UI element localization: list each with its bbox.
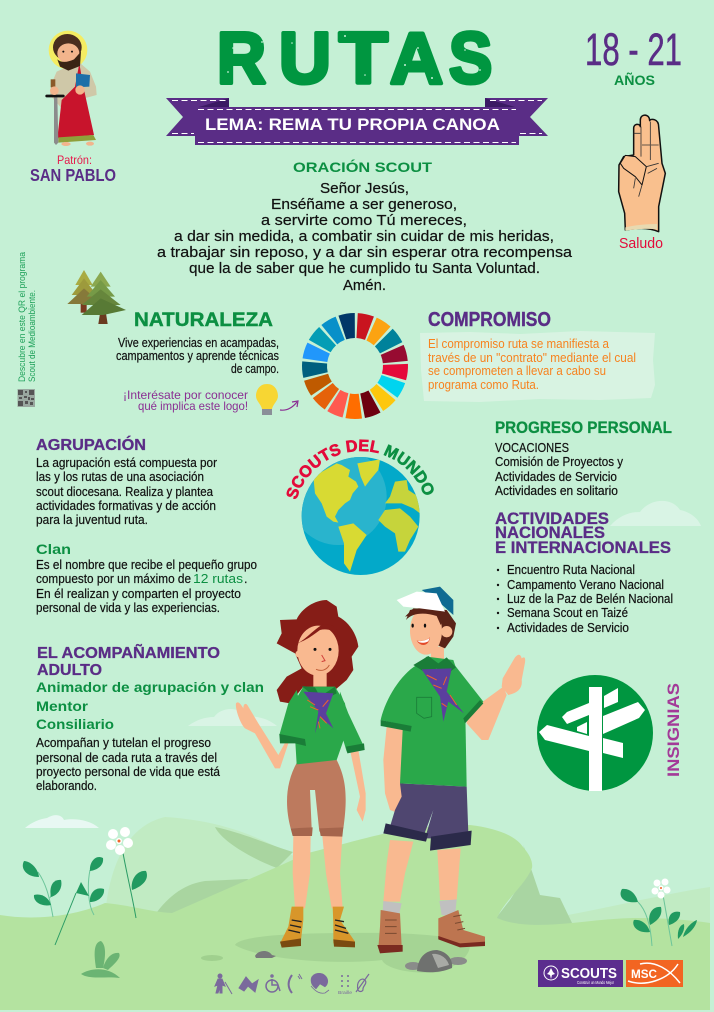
title: S: [449, 18, 492, 99]
panel: acompanamiento adulto: EL ACOMPAÑAMIENTO: [37, 642, 220, 662]
panel: agrupacion: AGRUPACIÓN: [36, 435, 146, 454]
plants right: [621, 878, 697, 946]
panel: clan: [36, 542, 257, 615]
panel: naturaleza: Vive experiencias en acampadas,: [118, 336, 279, 350]
icon: blind person: [215, 974, 232, 994]
logo: msc: [626, 960, 683, 987]
prayer: que la de saber que he cumplido tu Santa Voluntad.: [189, 261, 540, 277]
panel: compromiso: través de un "contrato" mediante el cual: [428, 351, 636, 365]
panel: agrupacion: [36, 435, 217, 527]
title: U: [279, 19, 331, 99]
panel: acompanamiento adulto: Acompañan y tutelan el progreso: [36, 736, 211, 750]
panel: compromiso: [420, 309, 655, 402]
scouts del mundo arc: SCOUTS DEL MUNDO: [286, 439, 434, 499]
arrow to logo: [280, 401, 298, 410]
prayer: Señor Jesús,: [320, 181, 409, 197]
panel: naturaleza: qué implica este logo!: [138, 399, 248, 413]
panel: acompanamiento adulto: elaborando.: [36, 779, 97, 793]
character: boy: [377, 587, 525, 953]
panel: progreso personal: [495, 419, 672, 498]
panel: clan: Clan: [36, 542, 71, 557]
panel: compromiso: COMPROMISO: [428, 309, 551, 331]
panel: acompanamiento adulto: Consiliario: [36, 717, 114, 732]
icon: hearing: [356, 974, 369, 992]
panel: clan: personal de vida y las experiencias.: [36, 601, 220, 615]
prayer: Enséñame a ser generoso,: [271, 197, 457, 213]
panel: clan: compuesto por un máximo de: [36, 572, 191, 586]
rocks: [255, 950, 467, 972]
icon: light bulb: [256, 384, 278, 415]
panel: actividades: E INTERNACIONALES: [495, 539, 671, 557]
panel: progreso personal: Actividades en solitario: [495, 484, 618, 498]
icon: trees: [67, 270, 126, 324]
icon: small white flower: [652, 878, 670, 898]
icon: head: [311, 973, 329, 993]
grass tuft: [81, 941, 120, 978]
panel: acompanamiento adulto: proyecto personal de vida que está: [36, 765, 220, 779]
insignias label: INSIGNIAS: [665, 683, 683, 777]
icon: san pablo: [47, 31, 97, 146]
prayer: [157, 158, 573, 294]
panel: progreso personal: Actividades de Servicio: [495, 470, 617, 484]
prayer: Amén.: [343, 278, 386, 294]
prayer: a dar sin medida, a combatir sin cuidar de mis heridas,: [174, 229, 554, 245]
icon: phone: [289, 974, 302, 993]
ribbon: lema: LEMA: REMA TU PROPIA CANOA: [205, 116, 500, 134]
prayer: a servirte como Tú mereces,: [261, 213, 467, 229]
panel: clan: Es el nombre que recibe el pequeño grupo: [36, 558, 257, 572]
qr note: Descubre en este QR el programa: [17, 251, 28, 382]
panel: naturaleza: ¡Interésate por conocer: [123, 388, 248, 402]
panel: clan: 12 rutas: [193, 571, 244, 586]
qr note: [17, 251, 38, 407]
panel: compromiso: programa como Ruta.: [428, 378, 539, 392]
panel: actividades: [495, 510, 673, 635]
panel: actividades: Actividades de Servicio: [507, 621, 629, 635]
logo: scouts: [538, 960, 623, 987]
panel: actividades: ACTIVIDADES: [495, 510, 609, 528]
panel: actividades: Luz de la Paz de Belén Nacional: [507, 592, 673, 606]
icon: braille: [338, 975, 353, 995]
logo: scouts: SCOUTS: [561, 966, 617, 982]
panel: compromiso: El compromiso ruta se manifiesta a: [428, 337, 609, 351]
icon: braille: Braille: [338, 990, 353, 995]
panel: agrupacion: scout diocesana. Realiza y plantea: [36, 485, 213, 499]
panel: actividades: NACIONALES: [495, 524, 605, 542]
panel: actividades: Encuentro Ruta Nacional: [507, 563, 635, 577]
panel: naturaleza: NATURALEZA: [134, 310, 273, 331]
panel: acompanamiento adulto: Animador de agrupación y clan: [36, 680, 264, 695]
sdg wheel: [298, 309, 412, 423]
panel: acompanamiento adulto: ADULTO: [37, 662, 102, 679]
saludo label: Saludo: [619, 235, 663, 252]
title: T: [339, 19, 388, 99]
panel: naturaleza: de campo.: [231, 362, 279, 376]
panel: compromiso: se comprometen a llevar a cabo su: [428, 364, 606, 378]
prayer: ORACIÓN SCOUT: [293, 158, 433, 175]
panel: progreso personal: VOCACIONES: [495, 441, 569, 455]
panel: actividades: Semana Scout en Taizé: [507, 606, 628, 620]
icon: sign language: [239, 977, 258, 992]
panel: acompanamiento adulto: Mentor: [36, 699, 89, 714]
landscape background: [0, 817, 710, 1010]
patron label: SAN PABLO: [30, 165, 116, 185]
age range: AÑOS: [614, 71, 655, 88]
panel: naturaleza: campamentos y aprende técnicas: [116, 349, 279, 363]
age range: [585, 24, 682, 88]
panel: naturaleza: [116, 310, 279, 413]
icon: white flower: [106, 827, 133, 855]
patron label: [30, 153, 116, 185]
icon: insignia signpost: [537, 675, 653, 791]
panel: progreso personal: Comisión de Proyectos y: [495, 455, 624, 469]
globe: [302, 457, 420, 575]
accessibility icons: [215, 973, 369, 995]
ribbon: lema: [166, 98, 548, 145]
panel: agrupacion: para la juventud ruta.: [36, 513, 148, 527]
character: girl: [236, 600, 366, 948]
panel: acompanamiento adulto: [36, 642, 264, 793]
icon: qr code: [18, 389, 35, 407]
logo: msc: MSC: [631, 969, 657, 981]
icon: scout salute hand: [619, 115, 665, 232]
panel: actividades: Campamento Verano Nacional: [507, 578, 664, 592]
title: [217, 18, 492, 99]
clouds: [25, 501, 701, 828]
logo: scouts: Construir un Mundo Mejor: [577, 980, 614, 985]
panel: clan: .: [244, 572, 247, 586]
icon: wheelchair: [266, 975, 280, 992]
panel: agrupacion: las y los rutas de una asociación: [36, 470, 204, 484]
plants left: [23, 827, 147, 978]
panel: acompanamiento adulto: personal de cada ruta a través del: [36, 751, 217, 765]
title: A: [390, 19, 443, 99]
qr note: Scout de Medioambiente.: [27, 290, 38, 382]
panel: progreso personal: PROGRESO PERSONAL: [495, 419, 672, 437]
panel: agrupacion: La agrupación está compuesta por: [36, 456, 217, 470]
patron label: Patrón:: [57, 153, 92, 167]
title: R: [217, 18, 266, 98]
prayer: a trabajar sin reposo, y a dar sin esperar otra recompensa: [157, 245, 573, 261]
panel: agrupacion: actividades formativas y de acción: [36, 499, 216, 513]
panel: clan: En él realizan y comparten el proyecto: [36, 587, 241, 601]
